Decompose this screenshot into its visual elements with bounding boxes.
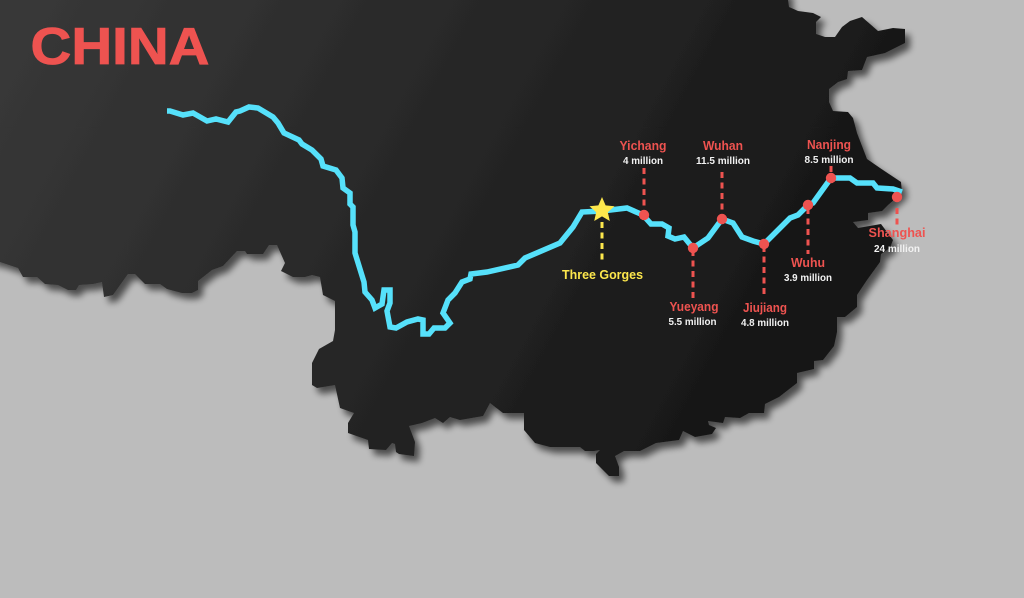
city: Yichang: 4 million — [623, 156, 663, 167]
leader: Three Gorges — [600, 222, 604, 262]
city: Yueyang: 5.5 million — [668, 317, 716, 328]
city: Wuhu: Wuhu — [791, 256, 825, 270]
city: Wuhan — [696, 139, 750, 224]
city: Yueyang: Yueyang — [670, 300, 718, 314]
city: Nanjing: 8.5 million — [804, 155, 854, 166]
city: Wuhu — [784, 200, 832, 284]
city: Jiujiang: Jiujiang — [743, 301, 787, 315]
label: Three Gorges: Three Gorges — [562, 268, 643, 282]
city: Wuhan: 11.5 million — [696, 156, 750, 167]
river: Yangtze — [167, 107, 902, 334]
city: Shanghai — [868, 192, 926, 255]
city: Wuhu: 3.9 million — [784, 273, 832, 284]
city: Nanjing: Nanjing — [807, 138, 851, 152]
marker: Three Gorges — [562, 197, 643, 282]
city: Yichang: Yichang — [620, 139, 666, 153]
city: Nanjing — [804, 138, 854, 183]
city: Jiujiang — [741, 239, 789, 329]
icon: star — [590, 197, 614, 221]
city: Shanghai: Shanghai — [868, 226, 926, 240]
city: Wuhan: Wuhan — [703, 139, 743, 153]
city: Yichang — [620, 139, 666, 220]
city: Yueyang — [668, 243, 718, 328]
city: Jiujiang: 4.8 million — [741, 318, 789, 329]
title: CHINA — [30, 18, 210, 76]
city: Shanghai: 24 million — [874, 244, 920, 255]
map: China silhouette — [0, 0, 905, 476]
